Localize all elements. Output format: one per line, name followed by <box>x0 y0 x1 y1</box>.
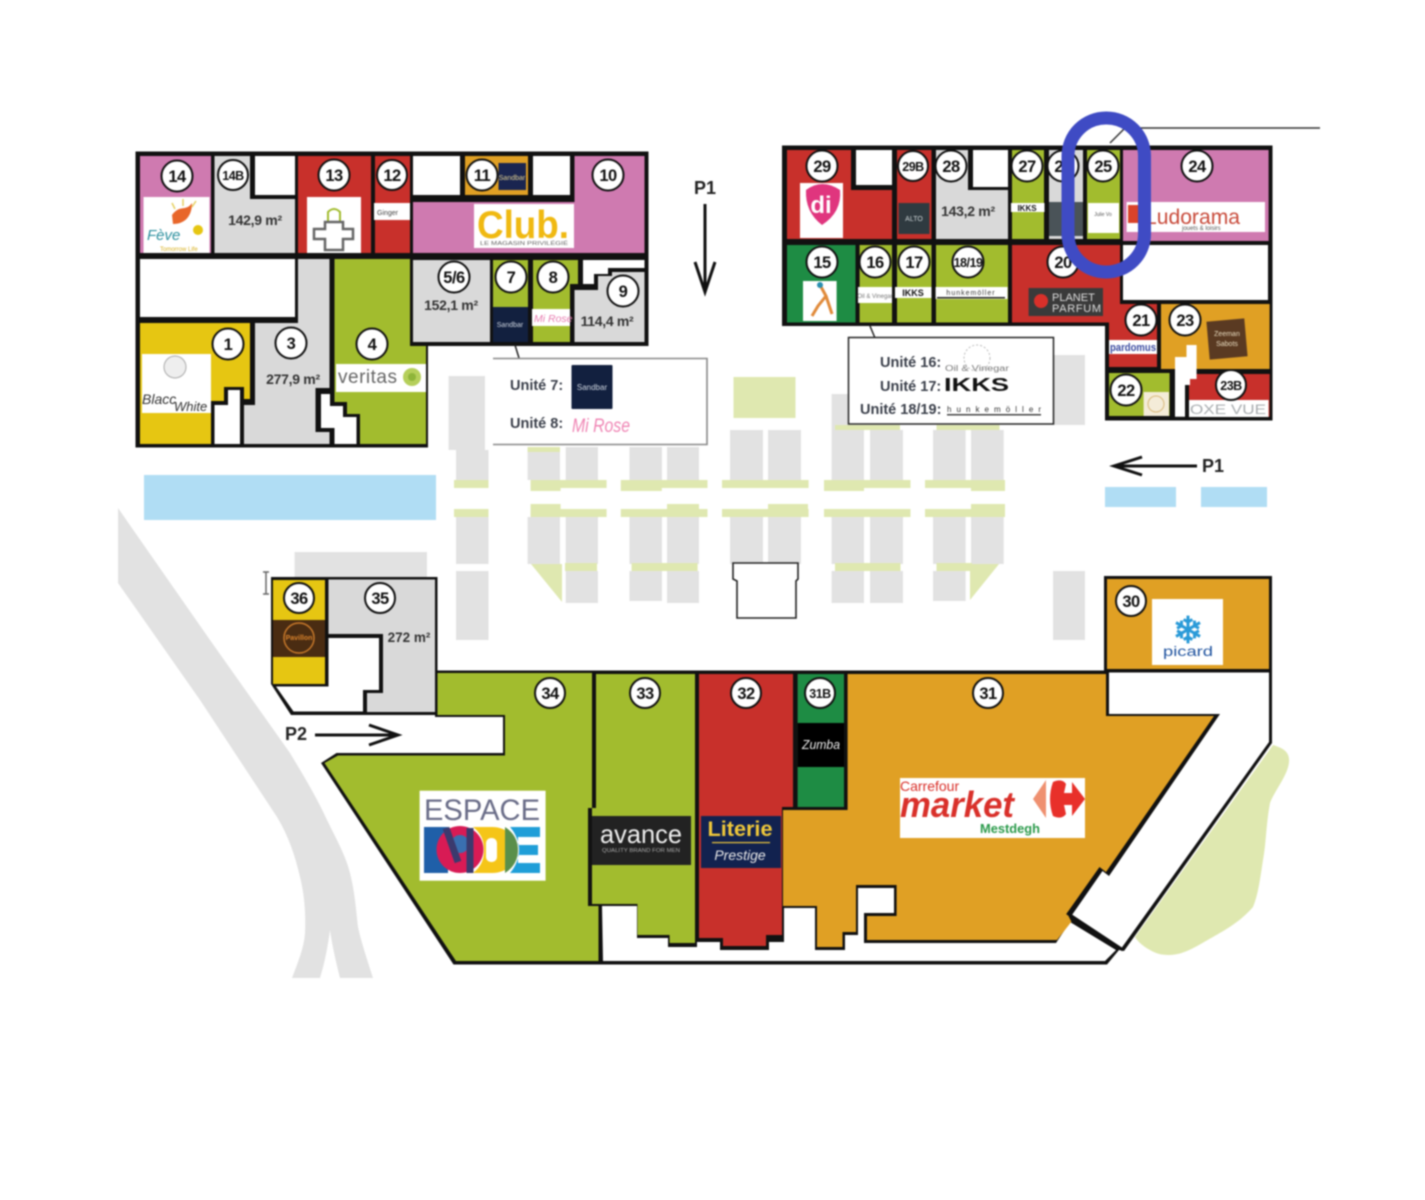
arrow: P1 top: P1 <box>694 178 716 198</box>
unit numbers: 30 <box>1122 593 1140 611</box>
highlight: blue ring around unit 25 <box>1068 118 1144 272</box>
unit 9: 114,4 m² <box>581 313 634 329</box>
unit numbers: 27 <box>1018 158 1036 176</box>
unit numbers: 33 <box>636 685 654 703</box>
unit 22 <box>1109 373 1170 416</box>
unit 33 avance: avance <box>600 819 682 849</box>
unit 25 <box>1087 150 1120 239</box>
unit numbers: 4 <box>368 336 378 354</box>
unit numbers: 29B <box>902 160 924 174</box>
empty unit right <box>1123 245 1268 300</box>
unit numbers: 16 <box>866 254 884 272</box>
unit 1: Blacc <box>142 391 176 407</box>
unit numbers: 22 <box>1117 382 1135 400</box>
unit 36: Pavillon <box>286 635 312 642</box>
unit numbers: 34 <box>541 685 560 703</box>
unit numbers: 9 <box>619 283 628 301</box>
logo: Espace Mode: ESPACE <box>424 794 540 827</box>
unit 29B <box>897 150 932 239</box>
unit 27: IKKS <box>1017 204 1037 213</box>
unit numbers: 11 <box>474 167 491 185</box>
unit 4 veritas <box>334 259 426 444</box>
arrow: P1 top <box>694 178 716 292</box>
unit 24 Ludorama: Ludorama <box>1145 206 1240 229</box>
cursor: text I-beam <box>263 572 269 594</box>
unit 12: Ginger <box>377 210 399 217</box>
unit 31B <box>798 674 844 807</box>
unit numbers: 15 <box>813 254 831 272</box>
unit 17 <box>895 245 932 322</box>
unit 14B <box>214 156 295 253</box>
unit 14: Tomorrow Life <box>160 247 198 253</box>
unit 24 Ludorama <box>1123 150 1269 241</box>
unit 32 Literie: Prestige <box>714 847 766 863</box>
unit numbers: 23 <box>1176 312 1194 330</box>
callout: units 7 and 8: Mi Rose <box>572 416 630 437</box>
stair access <box>321 394 356 444</box>
unit numbers: 21 <box>1132 312 1150 330</box>
unit 13 <box>298 156 371 253</box>
unit 29: di <box>810 192 832 219</box>
unit numbers: 10 <box>599 167 617 185</box>
unit 7 <box>493 260 528 342</box>
unit 9 <box>574 272 644 342</box>
unit 31 Carrefour <box>783 674 1214 947</box>
unit 35 <box>328 580 435 712</box>
unit numbers: 17 <box>905 254 923 272</box>
unit 17: IKKS <box>902 288 924 298</box>
logo: Carrefour Market: market <box>900 784 1016 825</box>
callout: units 7 and 8: Unité 8: <box>510 416 563 432</box>
callout: units 16 to 19: hunkemöller <box>947 405 1041 414</box>
unit 23 <box>1161 304 1270 369</box>
unit 15 <box>787 245 856 322</box>
empty unit <box>140 259 295 317</box>
leader line: callout 7/8 <box>515 345 519 358</box>
unit numbers: 13 <box>325 167 343 185</box>
unit 20 Planet Parfum <box>1012 245 1120 322</box>
unit numbers <box>162 150 1246 708</box>
unit 34 Espace Mode <box>324 673 598 961</box>
block: top-right shops <box>782 146 1272 420</box>
unit 18/19 <box>936 245 1008 322</box>
arrow: P1 right: P1 <box>1202 456 1224 476</box>
unit 14 <box>140 156 211 253</box>
green area: landscaped patch <box>1135 745 1289 955</box>
unit 32 Literie: Literie <box>708 818 772 841</box>
unit numbers: 24 <box>1188 158 1207 176</box>
unit 8 <box>532 260 578 342</box>
water: right blue rectangles <box>1105 487 1267 507</box>
unit 12 <box>374 156 410 253</box>
callout: units 16 to 19: Unité 17: <box>880 379 941 395</box>
unit 29B: ALTO <box>905 216 923 223</box>
unit 3: 277,9 m² <box>266 371 320 387</box>
arrow: P1 right <box>1114 456 1224 476</box>
callout: units 16 to 19: Unité 16: <box>880 355 941 371</box>
unit numbers: 5/6 <box>443 269 465 287</box>
unit 20 Planet Parfum: PARFUM <box>1052 303 1101 315</box>
logo: Carrefour Market <box>900 778 1085 838</box>
kiosk: white central unit <box>733 563 798 618</box>
logo: Espace Mode <box>420 791 546 881</box>
unit 35: 272 m² <box>388 630 431 645</box>
unit 3 <box>244 259 330 444</box>
unit 23B: OXE VUE <box>1190 401 1266 417</box>
service yard <box>602 888 1116 961</box>
unit numbers: 14 <box>168 168 187 186</box>
unit 16 <box>857 245 893 322</box>
road: grey access road <box>118 508 373 978</box>
unit numbers: 28 <box>942 158 960 176</box>
unit 5/6 <box>413 260 490 342</box>
unit numbers: 1 <box>224 336 233 354</box>
unit 10 Club: LE MAGASIN PRIVILÉGIÉ <box>480 240 569 247</box>
unit 28 <box>936 150 1008 239</box>
callout: units 7 and 8: Sandbar <box>577 383 607 392</box>
unit 26 <box>1049 150 1083 239</box>
unit numbers: 20 <box>1054 254 1072 272</box>
unit 29 <box>787 150 892 239</box>
unit 28: 143,2 m² <box>941 203 995 219</box>
door line <box>1067 913 1123 950</box>
callout: units 16 to 19: Oil & Vinegar <box>945 364 1009 373</box>
callout: units 16 to 19 <box>848 338 1054 424</box>
unit 33 avance: QUALITY BRAND FOR MEN <box>602 848 680 854</box>
unit numbers: 12 <box>383 167 401 185</box>
block: top-left shops <box>136 152 648 448</box>
unit numbers: 18/19 <box>954 256 983 270</box>
unit 5/6: 152,1 m² <box>424 297 478 313</box>
unit numbers: 23B <box>1220 379 1242 393</box>
unit 14B: 142,9 m² <box>228 212 282 228</box>
unit numbers: 8 <box>549 269 558 287</box>
unit 14: Fève <box>147 227 180 244</box>
unit 16: Oil & Vinegar <box>857 294 893 300</box>
arrow: P2 <box>285 724 398 745</box>
unit 23B <box>1189 374 1270 417</box>
leader line: callout 16-19 <box>870 326 875 338</box>
unit 1 <box>140 323 250 444</box>
unit 10 Club <box>413 156 644 253</box>
unit 11: Sandbar <box>499 175 526 182</box>
unit numbers: 31B <box>809 687 831 701</box>
unit numbers: 29 <box>813 158 831 176</box>
unit numbers: 7 <box>507 269 516 287</box>
unit 23: Sabots <box>1216 341 1238 348</box>
unit numbers: 31 <box>979 685 997 703</box>
unit 11 <box>465 156 528 195</box>
block: units 36 and 35 <box>271 577 438 715</box>
empty corridor right <box>1072 672 1269 948</box>
unit 8: Mi Rose <box>534 313 573 325</box>
unit 7: Sandbar <box>497 322 524 329</box>
unit numbers: 25 <box>1094 158 1112 176</box>
unit 30 Picard block: picard <box>1163 643 1213 659</box>
logo: Carrefour Market: Mestdegh <box>980 821 1040 836</box>
callout: units 16 to 19: Unité 18/19: <box>860 402 941 418</box>
unit 30 Picard block: ❄ <box>1172 610 1204 651</box>
block: main retail outline <box>321 576 1272 964</box>
unit numbers: 3 <box>287 335 296 353</box>
unit 30 Picard block <box>1104 576 1272 672</box>
unit 24 Ludorama: jouets & loisirs <box>1181 226 1221 232</box>
unit 21 <box>1109 304 1157 367</box>
unit 1: White <box>174 399 207 414</box>
unit numbers: 35 <box>371 590 389 608</box>
callout: units 7 and 8: Unité 7: <box>510 378 563 394</box>
unit 4 veritas: veritas <box>338 367 397 388</box>
unit 20 Planet Parfum: PLANET <box>1052 292 1095 304</box>
unit 18/19: hunkemöller <box>946 290 996 297</box>
leader line: unit 25 to right <box>1110 128 1320 143</box>
unit 36 <box>273 580 325 684</box>
unit 27 <box>1011 150 1044 239</box>
wall separator: 34 and service <box>599 905 602 962</box>
unit numbers: 32 <box>737 685 755 703</box>
stair: unit 9 notch <box>583 260 644 284</box>
unit 21: pardomus <box>1110 342 1156 354</box>
unit numbers: 36 <box>290 590 308 608</box>
stair: unit 23 access <box>1175 345 1197 417</box>
unit 32 Literie <box>699 674 793 946</box>
callout: units 7 and 8 <box>493 358 707 444</box>
callout: units 16 to 19: IKKS <box>944 375 1009 395</box>
unit numbers: 14B <box>222 169 244 183</box>
parking rows <box>295 355 1085 640</box>
unit 23: Zeeman <box>1214 331 1240 338</box>
logo: Carrefour Market: Carrefour <box>900 778 959 794</box>
arrow: P2: P2 <box>285 724 307 744</box>
unit 25: Julie Vo <box>1094 212 1112 218</box>
water: left blue rectangle <box>144 475 436 520</box>
unit numbers: 26 <box>1054 158 1072 176</box>
unit 31B: Zumba <box>801 737 840 752</box>
unit 33 avance <box>592 674 695 943</box>
unit 10 Club: Club. <box>477 204 569 247</box>
